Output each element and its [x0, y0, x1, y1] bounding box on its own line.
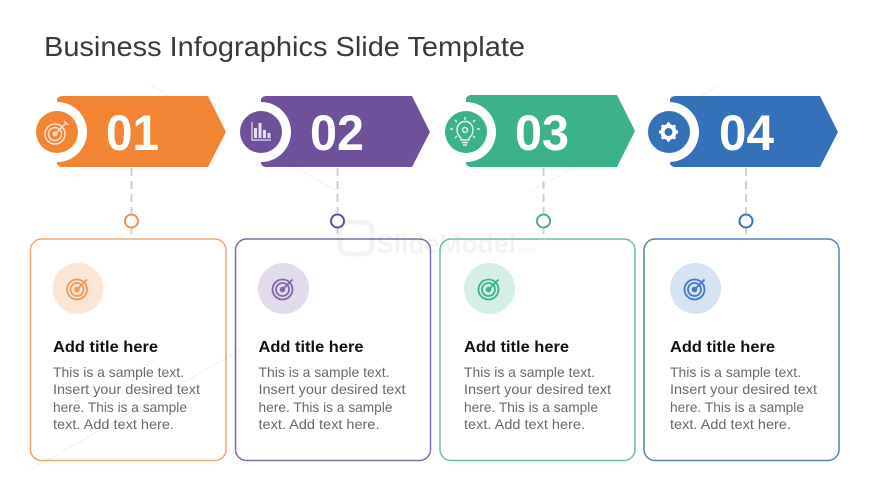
- step 3 header: [436, 95, 635, 234]
- ring 3: [436, 102, 496, 162]
- card 3 text: text. Add text here.: [464, 416, 585, 432]
- card 2 text: This is a sample text.: [258, 364, 390, 380]
- connector 4: [740, 168, 752, 234]
- panel: card 1: [30, 239, 226, 460]
- icon: target badge: [36, 111, 78, 153]
- title: Business Infographics Slide Template: [44, 31, 525, 62]
- card 4 text: [670, 364, 817, 432]
- step 4 header: [639, 96, 838, 234]
- card 1 text: Insert your desired text: [53, 381, 200, 397]
- card 2 text: text. Add text here.: [258, 416, 380, 432]
- card 3 text: [464, 364, 611, 432]
- icon: gear badge: [648, 111, 690, 153]
- number 02: 02: [310, 105, 364, 161]
- panel: card 4: [644, 239, 839, 460]
- card 4 text: This is a sample text.: [670, 364, 801, 380]
- card 4 title: Add title here: [670, 339, 775, 356]
- card 1 text: here. This is a sample: [53, 399, 187, 415]
- watermark: [340, 222, 536, 259]
- card 1 text: [53, 364, 200, 432]
- card 1 text: text. Add text here.: [53, 416, 174, 432]
- icon: target on pale blue circle: [670, 263, 721, 314]
- arrow banner 3: [466, 95, 635, 167]
- card 4 text: here. This is a sample: [670, 399, 804, 415]
- connector 2: [331, 168, 344, 234]
- step 2 header: [231, 96, 430, 234]
- arrow banner 2: [261, 96, 430, 167]
- panel: card 2: [236, 239, 430, 460]
- step 1 header: [27, 96, 226, 234]
- number 01: 01: [106, 105, 159, 161]
- icon: target on peach circle: [52, 263, 104, 314]
- arrow banner 4: [670, 96, 838, 167]
- card 2 text: here. This is a sample: [258, 399, 393, 415]
- card 2 title: Add title here: [258, 339, 364, 356]
- card 3 title: Add title here: [464, 339, 569, 356]
- connector 3: [537, 168, 550, 234]
- watermark: SlideModel: [376, 229, 516, 259]
- icon: bar chart badge: [240, 111, 282, 153]
- connector 1: [125, 168, 138, 234]
- card 3 text: Insert your desired text: [464, 381, 611, 397]
- watermark: .com: [516, 245, 536, 255]
- number 04: 04: [719, 105, 774, 161]
- card 1 title: Add title here: [53, 339, 158, 356]
- card 2 text: [258, 364, 406, 432]
- card 3 text: here. This is a sample: [464, 399, 598, 415]
- card 1 text: This is a sample text.: [53, 364, 184, 380]
- card 4 text: text. Add text here.: [670, 416, 791, 432]
- card 4 text: Insert your desired text: [670, 381, 817, 397]
- card 2 text: Insert your desired text: [258, 381, 406, 397]
- arrow banner 1: [57, 96, 226, 167]
- icon: target on mint circle: [464, 263, 515, 314]
- card 3 text: This is a sample text.: [464, 364, 595, 380]
- ring 1: [27, 102, 87, 162]
- ring 2: [231, 102, 291, 162]
- ring 4: [639, 102, 699, 162]
- number 03: 03: [515, 105, 569, 161]
- panel: card 3: [440, 239, 635, 460]
- icon: target on lavender circle: [258, 263, 309, 314]
- icon: light bulb badge: [445, 111, 487, 153]
